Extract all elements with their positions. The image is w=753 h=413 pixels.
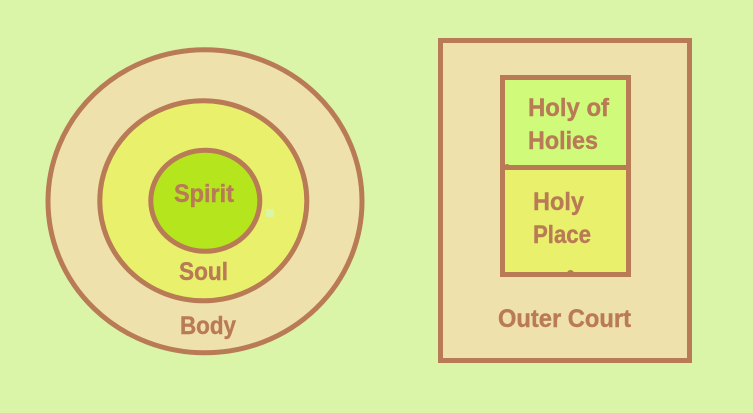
dot: divider join [504, 164, 510, 170]
concentric circles diagram [48, 50, 362, 353]
label: outer court: Outer Court [498, 305, 632, 333]
rectangle: outer court [440, 40, 690, 360]
circle: body [48, 50, 362, 353]
label: spirit: Spirit [174, 180, 235, 208]
label: soul: Soul [179, 258, 228, 286]
label: holy place: Holy [533, 188, 584, 216]
label: holy of holies: Holy of [528, 94, 610, 122]
temple plan diagram [440, 40, 690, 360]
label: holy of holies: Holies [528, 127, 598, 155]
circle: spirit [151, 150, 260, 251]
dot: bottom edge [567, 270, 574, 277]
speck [266, 209, 274, 217]
label: body: Body [180, 312, 236, 340]
label: holy place: Place [533, 221, 591, 249]
label: holy of holies [528, 94, 610, 155]
rectangle: holy of holies [502, 78, 628, 168]
rectangle: holy place [502, 168, 628, 274]
circle: soul [100, 101, 307, 301]
label: holy place [533, 188, 591, 249]
